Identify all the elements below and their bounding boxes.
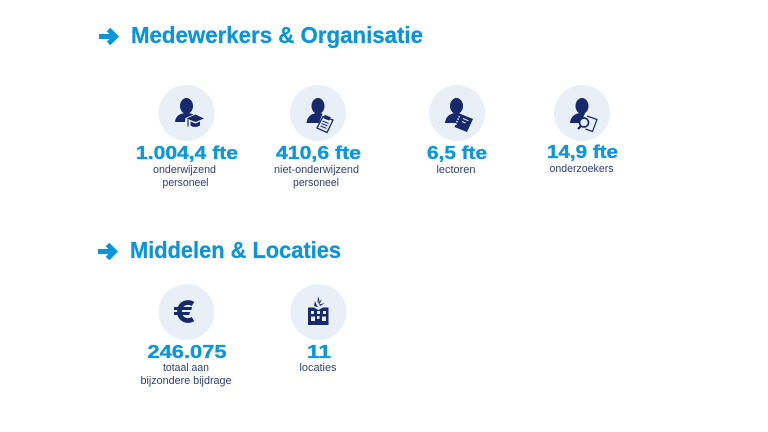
- stat: bijzondere bijdrage: bijzondere bijdrage: [140, 375, 232, 387]
- label: niet-onderwijzend: [274, 164, 359, 176]
- stat: niet-onderwijzend personeel: personeel: [293, 177, 339, 189]
- value: 1.004,4 fte: [136, 142, 238, 163]
- icon: building with flame: [290, 284, 346, 340]
- stat: locaties: [290, 284, 346, 374]
- heading: Middelen & Locaties: Middelen & Locaties: [130, 237, 341, 263]
- label: totaal aan: [163, 362, 209, 374]
- icon: euro: [158, 284, 214, 340]
- stat: onderwijzend personeel: [136, 85, 238, 189]
- stat: onderwijzend personeel: personeel: [162, 177, 208, 189]
- stat: niet-onderwijzend personeel: [274, 85, 361, 189]
- icon: heading arrow medewerkers: [99, 30, 116, 44]
- stat: lectoren: [427, 85, 487, 176]
- label: lectoren: [436, 164, 476, 176]
- icon: lecturer with notebook: [429, 85, 485, 141]
- label: onderwijzend: [153, 164, 216, 176]
- label: onderzoekers: [550, 163, 614, 175]
- icon: researcher with magnifier: [554, 85, 610, 141]
- icon: heading arrow middelen: [98, 244, 114, 258]
- stat: onderzoekers: [547, 85, 618, 175]
- value: 6,5 fte: [427, 142, 487, 163]
- heading: Medewerkers & Organisatie: Medewerkers & Organisatie: [131, 22, 423, 48]
- value: 14,9 fte: [547, 141, 618, 162]
- stat: bijzondere bijdrage: [140, 284, 232, 387]
- label: locaties: [300, 362, 337, 374]
- value: 246.075: [148, 341, 226, 362]
- icon: teacher: [158, 85, 214, 141]
- icon: staff with clipboard: [290, 85, 346, 141]
- value: 410,6 fte: [276, 142, 361, 163]
- value: 11: [307, 341, 331, 362]
